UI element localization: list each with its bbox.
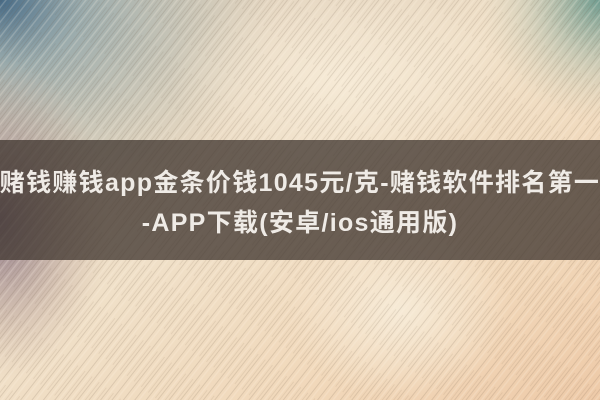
title band bbox=[0, 140, 600, 260]
title line 1: 赌钱赚钱app金条价钱1045元/克-赌钱软件排名第一 bbox=[0, 169, 600, 197]
title line 2: -APP下载(安卓/ios通用版) bbox=[142, 209, 458, 237]
